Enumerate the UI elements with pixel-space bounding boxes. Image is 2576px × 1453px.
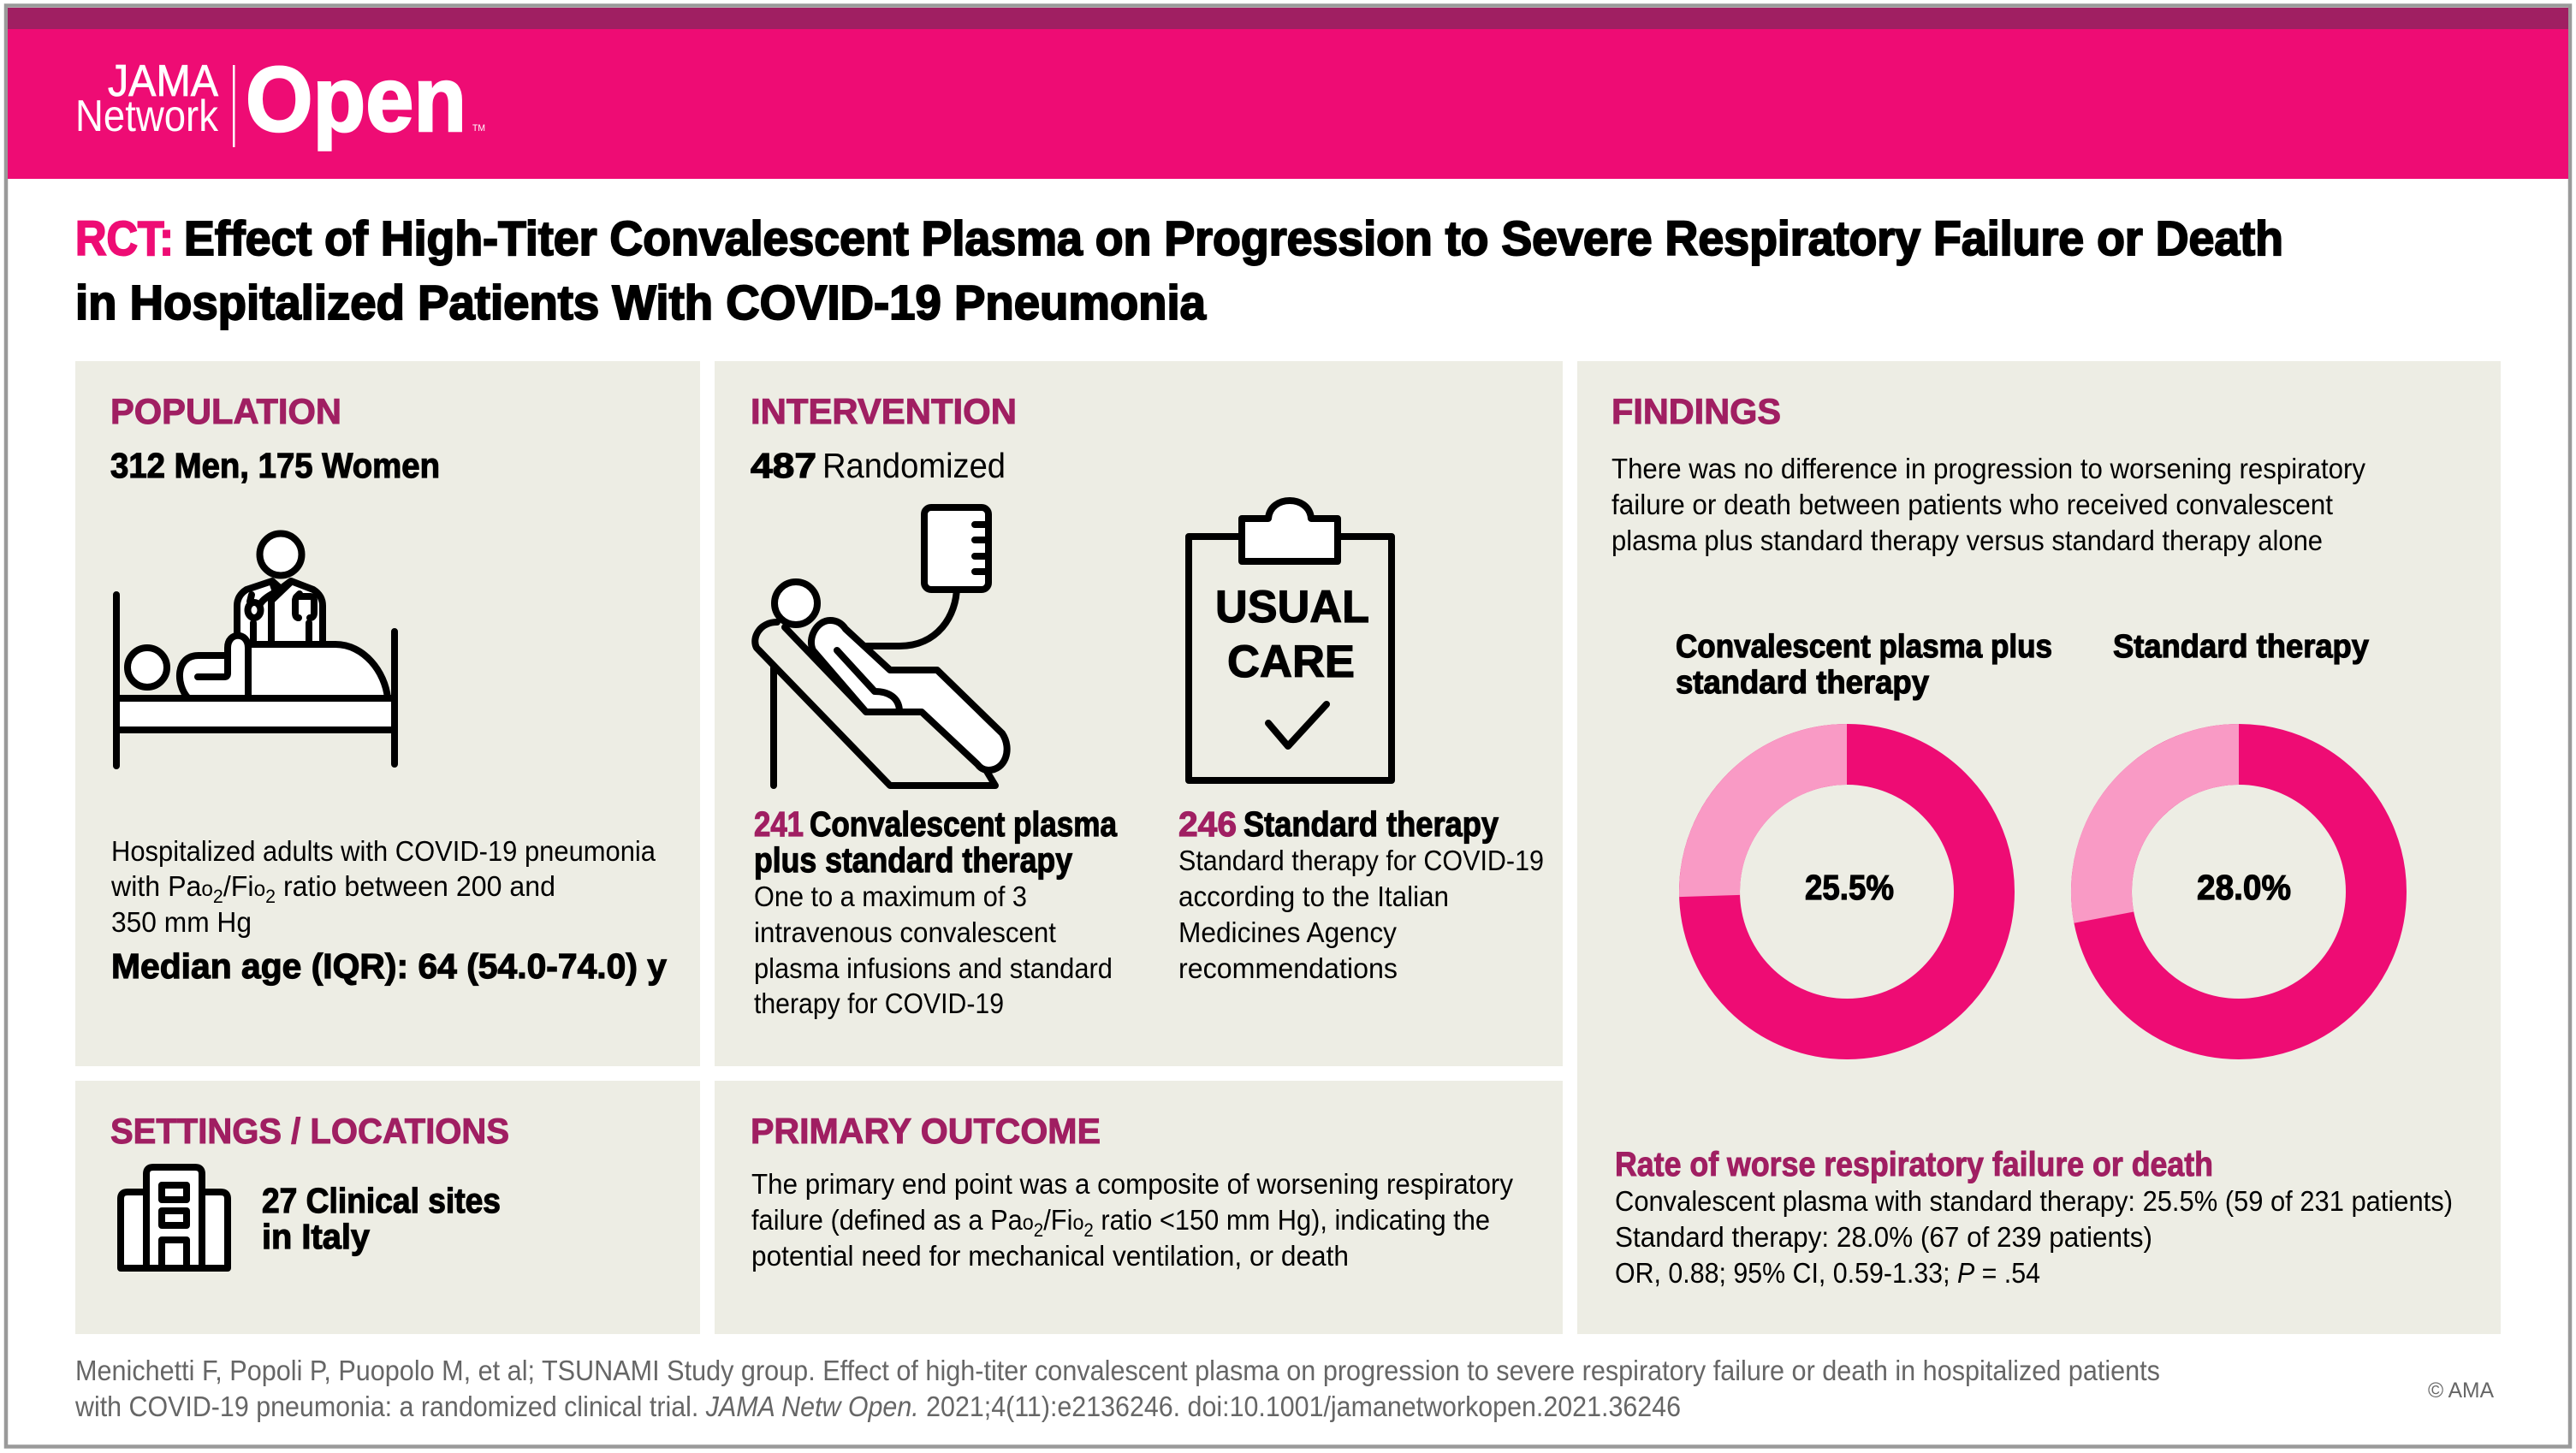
title (75, 211, 2283, 330)
primary outcome text: 2 (1083, 1219, 1094, 1241)
title: Effect of High-Titer Convalescent Plasma on Progression to Severe Respiratory Failure or Death (184, 211, 2283, 266)
arm: standard therapy: 246 (1178, 804, 1237, 844)
patient description: 2 (213, 886, 223, 907)
primary outcome text: The primary end point was a composite of worsening respiratory (751, 1168, 1513, 1200)
patient description: 350 mm Hg (111, 906, 252, 938)
chart label: convalescent plasma: Convalescent plasma plus (1676, 629, 2052, 665)
panel: population (75, 361, 700, 1066)
site count: 27 Clinical sites (262, 1181, 501, 1220)
arm: standard therapy: according to the Italian (1178, 881, 1449, 912)
primary outcome text: /Fi (1043, 1204, 1072, 1236)
copyright: © AMA (2428, 1379, 2494, 1403)
logo: JAMA Network Open: Open (246, 47, 466, 151)
arm: standard therapy: recommendations (1178, 952, 1398, 984)
site count (262, 1181, 501, 1256)
findings summary: plasma plus standard therapy versus standard therapy alone (1611, 525, 2323, 556)
arm: standard therapy (1178, 804, 1544, 984)
logo: JAMA Network Open: JAMA (108, 56, 218, 106)
results heading: Rate of worse respiratory failure or death (1615, 1146, 2213, 1183)
chart label: convalescent plasma (1676, 629, 2052, 701)
panel: settings and locations (75, 1081, 700, 1334)
donut chart: standard therapy 28.0%: 28.0% (2197, 868, 2291, 907)
patient description: ratio between 200 and (276, 870, 555, 902)
donut chart: convalescent plasma 25.5%: 25.5% (1805, 868, 1894, 907)
heading: settings / locations: SETTINGS / LOCATIONS (110, 1111, 509, 1151)
patient description: Hospitalized adults with COVID-19 pneumonia (111, 835, 656, 867)
icon: hospital building (121, 1167, 228, 1268)
logo: JAMA Network Open (75, 47, 485, 151)
primary outcome text (751, 1168, 1513, 1272)
randomized count: 487 (751, 446, 816, 485)
logo: JAMA Network Open: Network (75, 92, 219, 141)
arm: convalescent plasma: plus standard therapy (754, 840, 1072, 880)
patient description: with Pao (111, 870, 213, 902)
patient description (110, 835, 656, 938)
panel: primary outcome (715, 1081, 1563, 1334)
citation (74, 1355, 2160, 1422)
title: RCT: (75, 211, 174, 266)
patient description: o (254, 877, 265, 901)
arm: convalescent plasma: One to a maximum of 3 (754, 881, 1027, 912)
chart label: standard therapy: Standard therapy (2113, 629, 2369, 665)
median age: Median age (IQR): 64 (54.0-74.0) y (111, 946, 667, 986)
chart label: convalescent plasma: standard therapy (1676, 665, 1929, 701)
site count: in Italy (262, 1217, 370, 1256)
icon: usual care clipboard: USUAL (1215, 582, 1369, 632)
patient description: /Fi (223, 870, 254, 902)
findings summary: There was no difference in progression to worsening respiratory (1611, 453, 2365, 484)
donut chart: standard therapy 28.0% (2101, 755, 2376, 1029)
donut chart: convalescent plasma 25.5% (1710, 755, 1984, 1029)
results text: Standard therapy: 28.0% (67 of 239 patients) (1615, 1221, 2152, 1253)
arm: convalescent plasma: plasma infusions and standard (754, 952, 1113, 984)
primary outcome text: o (1072, 1211, 1083, 1235)
results text: OR, 0.88; 95% CI, 0.59-1.33; P = .54 (1615, 1257, 2040, 1289)
population counts: 312 Men, 175 Women (110, 446, 440, 485)
primary outcome text: ratio <150 mm Hg), indicating the (1094, 1204, 1490, 1236)
arm: standard therapy: Standard therapy for COVID-19 (1178, 845, 1544, 876)
results text: Convalescent plasma with standard therapy: 25.5% (59 of 231 patients) (1615, 1185, 2453, 1217)
panel: intervention (715, 361, 1563, 1066)
arm: convalescent plasma: therapy for COVID-19 (754, 987, 1004, 1019)
heading: findings: FINDINGS (1611, 391, 1781, 431)
patient description: 2 (265, 886, 276, 907)
arm: convalescent plasma: intravenous convalescent (754, 916, 1056, 948)
header band (8, 8, 2568, 179)
heading: population: POPULATION (110, 391, 341, 431)
findings summary (1611, 453, 2365, 556)
primary outcome text: 2 (1034, 1219, 1043, 1241)
logo: JAMA Network Open: TM (472, 123, 485, 133)
arm: standard therapy: Medicines Agency (1178, 916, 1397, 948)
results text (1615, 1185, 2453, 1289)
arm: convalescent plasma: 241 (754, 804, 804, 844)
panel: findings (1577, 361, 2501, 1334)
primary outcome text: potential need for mechanical ventilation, or death (751, 1240, 1349, 1272)
citation: with COVID-19 pneumonia: a randomized clinical trial. JAMA Netw Open. 2021;4(11):e2136246. doi:10.1001/jamanetworkopen.2021.36246 (74, 1391, 1681, 1422)
heading: primary outcome: PRIMARY OUTCOME (751, 1111, 1101, 1151)
citation: Menichetti F, Popoli P, Puopolo M, et al; TSUNAMI Study group. Effect of high-titer convalescent plasma on progression to severe respiratory failure or death in hospitalized patients (75, 1355, 2160, 1386)
title: in Hospitalized Patients With COVID-19 Pneumonia (75, 276, 1207, 330)
randomized count (751, 446, 1006, 485)
icon: usual care clipboard: CARE (1227, 637, 1355, 687)
findings summary: failure or death between patients who received convalescent (1611, 489, 2333, 520)
heading: intervention: INTERVENTION (751, 391, 1017, 431)
randomized count: Randomized (822, 446, 1006, 485)
primary outcome text: failure (defined as a Pao (751, 1204, 1042, 1236)
arm: standard therapy: Standard therapy (1243, 804, 1499, 844)
arm: convalescent plasma (754, 804, 1118, 1019)
icon: doctor beside patient in bed (116, 534, 395, 766)
icon: usual care clipboard (1189, 501, 1392, 780)
icon: patient receiving plasma infusion (755, 507, 1007, 786)
arm: convalescent plasma: Convalescent plasma (810, 804, 1118, 844)
